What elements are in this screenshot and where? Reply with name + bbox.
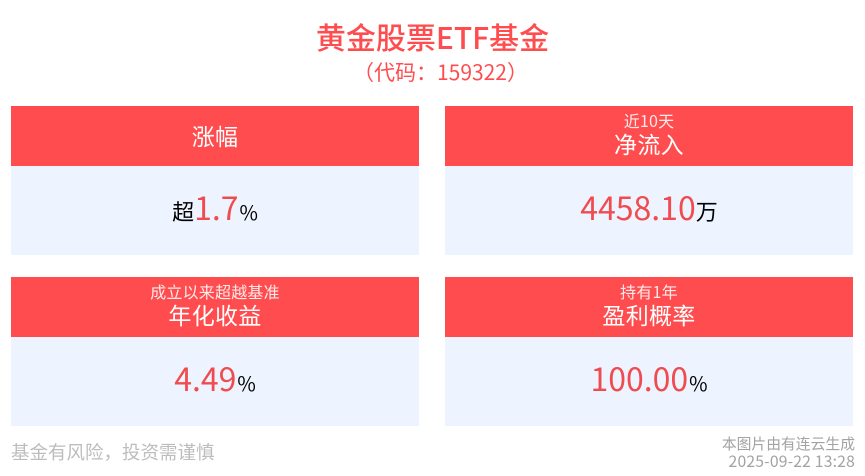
panel value: annualized return: 4.49% bbox=[174, 355, 256, 401]
panel header: annualized return: 年化收益 bbox=[168, 297, 262, 331]
generation note and timestamp: 本图片由有连云生成 bbox=[722, 433, 855, 454]
panel value: profit probability: 100.00% bbox=[590, 355, 708, 401]
subtitle: fund code: （代码：159322） bbox=[353, 57, 528, 87]
panel header: annualized return: 成立以来超越基准 bbox=[150, 279, 280, 303]
panel value: gain bbox=[11, 166, 419, 255]
panel: profit probability bbox=[445, 277, 853, 426]
panel: annualized return bbox=[11, 277, 419, 426]
panel header: gain bbox=[11, 106, 419, 166]
panel header: net inflow bbox=[445, 106, 853, 166]
panel header: gain: 涨幅 bbox=[192, 118, 238, 152]
panel value: gain: 超1.7% bbox=[172, 184, 258, 230]
panel header: net inflow: 近10天 bbox=[624, 108, 674, 132]
panel: net inflow bbox=[445, 106, 853, 255]
panel header: profit probability: 持有1年 bbox=[620, 279, 678, 303]
panel header: annualized return bbox=[11, 277, 419, 337]
panel: gain bbox=[11, 106, 419, 255]
panel value: profit probability bbox=[445, 337, 853, 426]
generation note and timestamp: 2025-09-22 13:28 bbox=[729, 449, 855, 472]
panel value: net inflow: 4458.10万 bbox=[580, 184, 718, 230]
panel value: annualized return bbox=[11, 337, 419, 426]
panel header: profit probability: 盈利概率 bbox=[602, 297, 696, 331]
panel header: profit probability bbox=[445, 277, 853, 337]
panel value: net inflow bbox=[445, 166, 853, 255]
title: 黄金股票ETF基金 bbox=[316, 14, 549, 58]
generation note and timestamp bbox=[722, 433, 855, 472]
risk disclaimer: 基金有风险，投资需谨慎 bbox=[11, 439, 215, 465]
panel header: net inflow: 净流入 bbox=[614, 126, 684, 160]
